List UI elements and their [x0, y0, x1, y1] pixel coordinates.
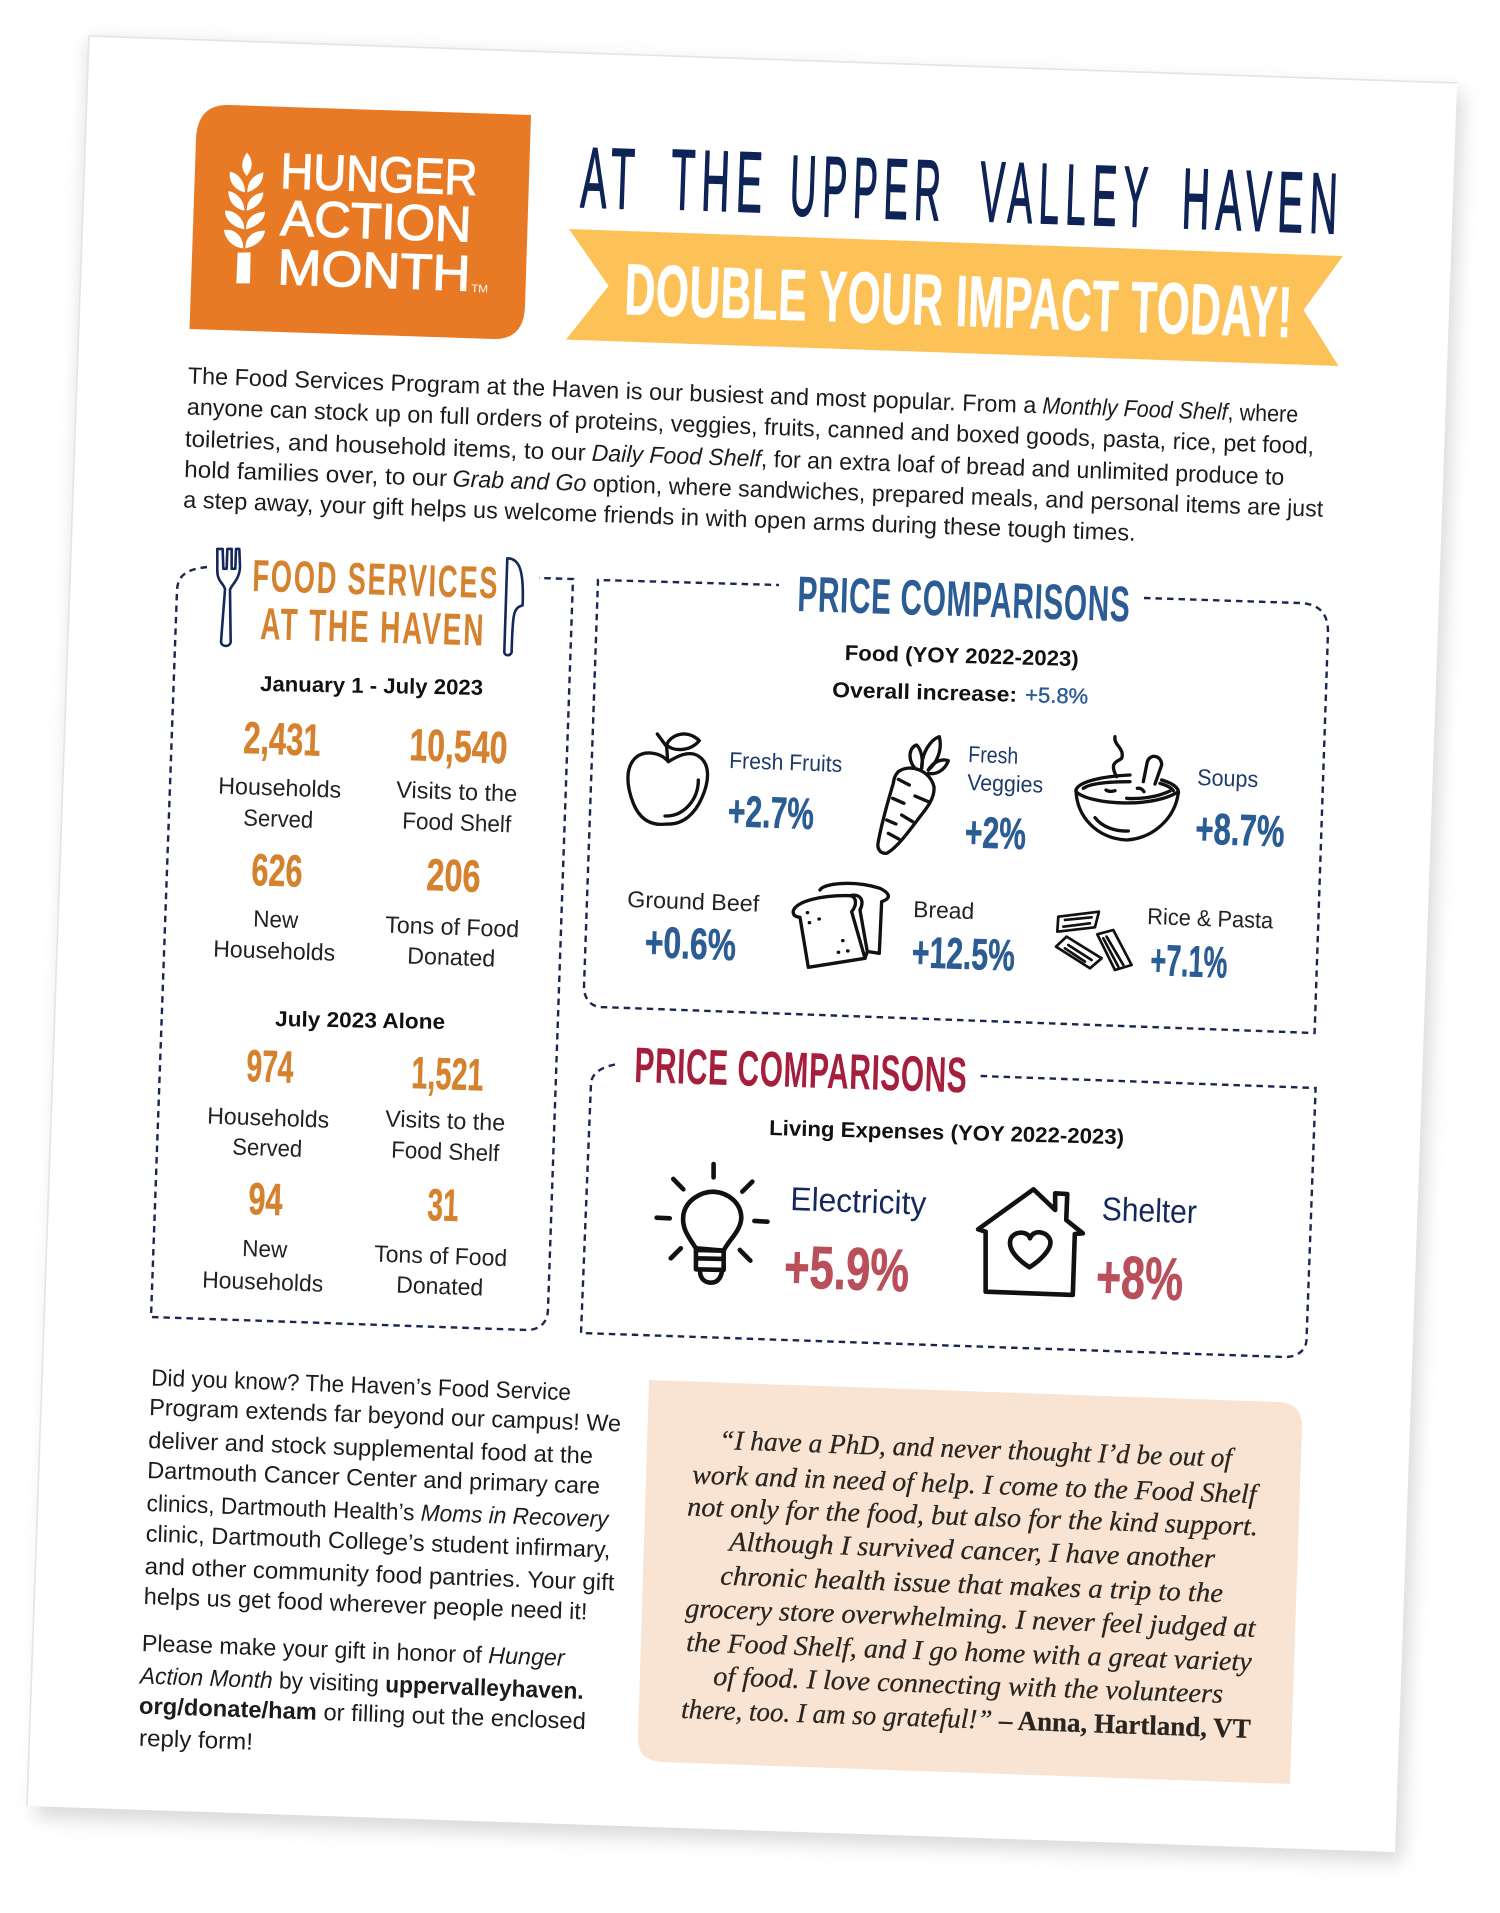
stat: visits to the food shelf: 10,540 [409, 719, 508, 773]
stat: tons of food donated: Tons of Food [385, 912, 520, 942]
stat: July households served: Served [232, 1134, 303, 1162]
quote text [681, 1424, 1260, 1744]
item: fresh veggies [964, 741, 1044, 859]
item: fresh fruits [727, 747, 843, 839]
logo wordmark: ACTION [280, 190, 472, 253]
heading: food services at the haven [252, 550, 500, 656]
stat: July new households [202, 1173, 324, 1297]
quote text: Although I survived cancer, I have another [727, 1525, 1216, 1573]
subheading: food year over year: Food (YOY 2022-2023) [844, 641, 1079, 671]
panel: testimonial quote [638, 1380, 1302, 1784]
stat: new households: 626 [251, 844, 303, 897]
stat: new households: New [253, 906, 300, 933]
panel: food price comparisons [584, 566, 1328, 1033]
icon: wheat [224, 153, 265, 283]
quote text: not only for the food, but also for the kind support. [687, 1491, 1259, 1541]
item: soups: +8.7% [1195, 805, 1285, 857]
item: soups [1195, 764, 1285, 857]
quote text: the Food Shelf, and I go home with a great variety [686, 1626, 1253, 1677]
intro paragraph: The Food Services Program at the Haven is our busiest and most popular. From a [187, 363, 1038, 418]
stat: July tons donated [374, 1179, 508, 1301]
stat: July visits [385, 1047, 506, 1166]
item: ground beef: Ground Beef [627, 886, 760, 917]
stat: July tons donated: Donated [396, 1272, 484, 1301]
stat: July tons donated: 31 [427, 1179, 459, 1231]
item: shelter: +8% [1095, 1243, 1184, 1313]
intro paragraph: Monthly Food Shelf, where [1042, 392, 1299, 427]
stat: July households served: Households [207, 1103, 330, 1133]
stat: households served: Households [218, 773, 342, 803]
item: rice and pasta [1147, 903, 1274, 988]
overall increase: Overall increase: [832, 678, 1017, 707]
stat: tons of food donated: Donated [407, 943, 496, 972]
item: shelter: Shelter [1101, 1190, 1197, 1230]
stat: visits to the food shelf: Food Shelf [402, 808, 512, 837]
item: electricity: Electricity [790, 1180, 927, 1222]
heading: food services at the haven: FOOD SERVICES [252, 550, 500, 608]
subheading: January to July: January 1 - July 2023 [260, 672, 483, 700]
item: bread [911, 896, 1016, 981]
logo wordmark [277, 143, 488, 302]
text block: did you know [143, 1365, 621, 1624]
panel: food services at the Haven [151, 549, 573, 1330]
text block: did you know: Dartmouth Cancer Center and primary care [147, 1457, 600, 1499]
stat: households served [218, 712, 342, 833]
stat: July new households: New [242, 1235, 289, 1263]
item: electricity: +5.9% [783, 1233, 910, 1304]
text block: did you know: Program extends far beyond our campus! We [149, 1394, 621, 1436]
icon: light bulb [657, 1164, 767, 1283]
title: At the Upper Valley Haven: UPPER [788, 138, 949, 239]
intro paragraph: Grab and Go option, where sandwiches, prepared meals, and personal items are just [452, 465, 1324, 522]
stat: tons of food donated [385, 849, 520, 972]
item: fresh fruits: +2.7% [727, 787, 815, 839]
stat: new households [213, 844, 336, 966]
banner: Double your impact today [566, 229, 1343, 366]
title: At the Upper Valley Haven [579, 130, 1346, 253]
item: fresh veggies: Fresh [968, 741, 1019, 769]
logo wordmark: HUNGER [280, 143, 478, 206]
stat: households served: 2,431 [243, 712, 321, 766]
icon: pasta [1056, 912, 1132, 970]
stat: tons of food donated: 206 [426, 849, 481, 902]
logo wordmark: TM [471, 283, 488, 296]
item: fresh fruits: Fresh Fruits [729, 747, 843, 777]
overall increase: +5.8% [1025, 683, 1088, 709]
stat: July visits: 1,521 [411, 1047, 484, 1101]
heading: price comparisons: PRICE COMPARISONS [797, 566, 1131, 632]
heading: price comparisons: PRICE COMPARISONS [634, 1037, 968, 1103]
text block: call to give: org/donate/ham or filling out the enclosed [139, 1693, 586, 1734]
intro paragraph: anyone can stock up on full orders of proteins, veggies, fruits, canned and boxed goods, pasta, rice, pet food, [186, 394, 1315, 459]
logo: Hunger Action Month [190, 105, 531, 339]
item: ground beef [627, 886, 760, 970]
item: bread: Bread [913, 896, 975, 924]
item: fresh veggies: Veggies [967, 769, 1044, 798]
text block: did you know: clinic, Dartmouth College’s student infirmary, [145, 1520, 611, 1563]
icon: apple [628, 734, 708, 824]
title: At the Upper Valley Haven: AT [579, 130, 643, 228]
item: shelter [1095, 1190, 1197, 1313]
quote text: work and in need of help. I come to the Food Shelf [692, 1459, 1260, 1509]
intro paragraph: Daily Food Shelf, for an extra loaf of bread and unlimited produce to [591, 440, 1285, 490]
icon: fork [217, 549, 240, 646]
text block: call to give: Action Month by visiting uppervalleyhaven. [138, 1662, 584, 1704]
title: At the Upper Valley Haven: THE [669, 132, 771, 231]
icon: carrot [878, 737, 948, 853]
item: rice and pasta: +7.1% [1150, 936, 1228, 988]
item: soups: Soups [1197, 764, 1259, 792]
stat: July visits: Visits to the [385, 1106, 506, 1136]
overall increase [832, 678, 1088, 709]
stat: July new households: 94 [248, 1173, 283, 1225]
stat: July households served [207, 1040, 330, 1162]
stat: July new households: Households [202, 1267, 324, 1297]
stat: July tons donated: Tons of Food [374, 1241, 508, 1271]
stat: new households: Households [213, 936, 336, 966]
item: bread: +12.5% [911, 928, 1016, 981]
quote text: of food. I love connecting with the volunteers [713, 1660, 1224, 1709]
item: rice and pasta: Rice & Pasta [1147, 903, 1274, 933]
panel: living expense comparisons [581, 1037, 1316, 1357]
text block: did you know: clinics, Dartmouth Health’s Moms in Recovery [146, 1490, 610, 1532]
title: At the Upper Valley Haven: VALLEY [978, 144, 1156, 246]
text block: did you know: helps us get food wherever people need it! [143, 1583, 588, 1624]
subheading: living expenses: Living Expenses (YOY 2022-2023) [769, 1116, 1124, 1149]
icon: house with heart [978, 1189, 1083, 1295]
stat: households served: Served [243, 805, 314, 833]
quote text: grocery store overwhelming. I never feel judged at [685, 1592, 1257, 1643]
text block: call to give: reply form! [139, 1725, 253, 1755]
item: fresh veggies: +2% [964, 808, 1027, 859]
quote text: “I have a PhD, and never thought I’d be out of [719, 1424, 1236, 1473]
icon: knife [504, 558, 523, 655]
icon: bread [793, 883, 888, 967]
text block: did you know: Did you know? The Haven’s Food Service [151, 1365, 571, 1405]
item: electricity [783, 1180, 927, 1304]
item: ground beef: +0.6% [644, 918, 737, 970]
intro paragraph: a step away, your gift helps us welcome friends in with open arms during these tough times. [183, 487, 1136, 546]
intro paragraph [183, 363, 1324, 546]
logo wordmark: MONTH [277, 239, 471, 302]
text block: call to give: Please make your gift in honor of Hunger [141, 1630, 566, 1671]
text block: call to give [138, 1630, 586, 1755]
stat: visits to the food shelf [396, 719, 518, 837]
icon: soup bowl [1076, 737, 1178, 840]
quote text: chronic health issue that makes a trip to the [720, 1560, 1224, 1608]
intro paragraph: hold families over, to our [184, 456, 448, 491]
subheading: July alone: July 2023 Alone [275, 1007, 445, 1034]
intro paragraph: toiletries, and household items, to our [185, 426, 586, 465]
stat: July visits: Food Shelf [391, 1137, 500, 1166]
text block: did you know: deliver and stock supplemental food at the [148, 1427, 593, 1469]
stat: visits to the food shelf: Visits to the [396, 777, 518, 807]
quote text: there, too. I am so grateful!” – Anna, Hartland, VT [681, 1693, 1251, 1744]
text block: did you know: and other community food pantries. Your gift [144, 1553, 615, 1595]
heading: food services at the haven: AT THE HAVEN [260, 598, 486, 656]
stat: July households served: 974 [246, 1040, 294, 1093]
